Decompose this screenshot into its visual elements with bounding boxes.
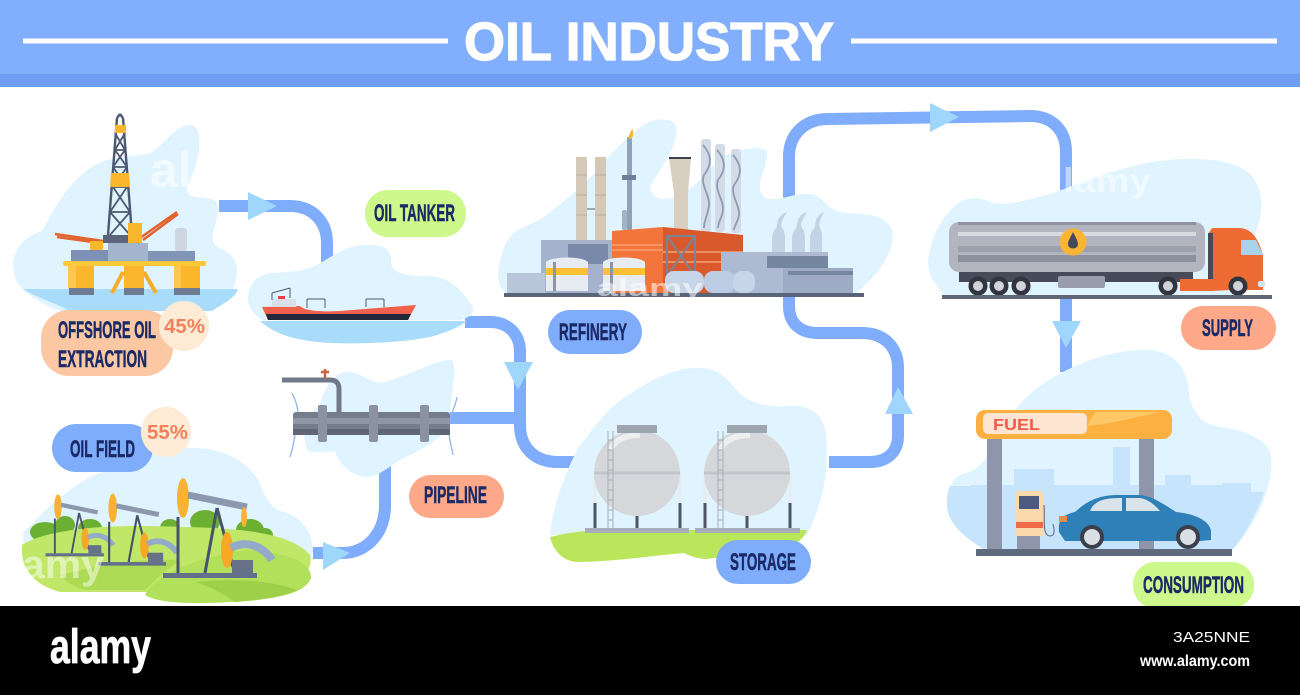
city skyline: [947, 447, 1264, 550]
oil rig: [55, 114, 206, 295]
label: pipeline: PIPELINE: [424, 482, 487, 509]
hills: [22, 526, 311, 592]
deck buildings: [71, 250, 108, 262]
chimneys: [576, 157, 587, 242]
storage sphere 1: [585, 425, 689, 533]
panel: refinery: [498, 120, 893, 354]
right building: [721, 252, 828, 293]
percentage: 55%: 55%: [147, 422, 188, 444]
water: [23, 289, 238, 311]
label: supply: [1181, 306, 1276, 350]
percentage: 45%: [159, 301, 209, 351]
tanker truck: [942, 222, 1272, 299]
background blob: offshore: [13, 125, 237, 311]
label: offshore oil extraction: OFFSHORE OIL: [58, 317, 156, 344]
twisted stacks: [701, 139, 741, 233]
ship: [262, 288, 416, 320]
background blob: pipeline: [305, 360, 454, 477]
platform legs: [112, 272, 156, 293]
watermark: rig blob: al: [150, 142, 192, 198]
pumpjack: medium: [98, 494, 177, 566]
gas station: [976, 410, 1232, 556]
flow arrows: [248, 103, 1081, 570]
cranes: [55, 234, 103, 243]
fuel pump: [1016, 491, 1054, 550]
flow pipes: [219, 116, 1066, 553]
panel: supply: [928, 159, 1276, 350]
title: OIL INDUSTRY: [464, 12, 834, 72]
wheels: [969, 277, 1247, 295]
panel: oil tanker: [248, 190, 473, 343]
background blob: storage: [550, 368, 827, 535]
car: [1059, 495, 1211, 549]
header banner: [0, 0, 1300, 87]
pumpjack: large: [163, 478, 272, 578]
derrick: [108, 114, 132, 235]
panel: offshore oil extraction: [13, 114, 238, 376]
bushes: [30, 510, 273, 542]
storage tanks: [546, 258, 645, 291]
label: oil field: [52, 424, 153, 472]
panel: oil field: [22, 407, 313, 603]
background blob: refinery: [498, 120, 893, 293]
label: supply: SUPPLY: [1202, 315, 1253, 342]
silos: [772, 212, 787, 252]
label: offshore oil extraction: [41, 310, 173, 376]
label: oil tanker: [365, 190, 466, 237]
footer url: www.alamy.com: [1139, 653, 1250, 670]
background blob: consumption: [947, 350, 1271, 550]
footer bar: [0, 606, 1300, 695]
big chimney: [669, 158, 691, 238]
truck cab: [1180, 228, 1263, 291]
flare tower: [627, 137, 632, 230]
footer logo: alamy: [50, 621, 151, 674]
storage sphere 2: [695, 425, 800, 533]
watermark: field: amy: [22, 543, 105, 587]
background blob: supply: [928, 159, 1262, 295]
label: storage: [716, 540, 811, 584]
water: [260, 321, 467, 343]
image id: 3A25NNE: [1173, 629, 1250, 646]
label: oil tanker: OIL TANKER: [374, 200, 455, 227]
background blob: field: [23, 448, 313, 565]
label: storage: STORAGE: [730, 549, 796, 576]
label: consumption: [1133, 562, 1254, 608]
percentage: 55%: [141, 407, 191, 457]
grass: [550, 530, 807, 562]
pipeline graphic: [282, 369, 457, 457]
panel: pipeline: [282, 360, 504, 518]
watermark: refinery: alamy: [597, 275, 704, 302]
label: refinery: [548, 310, 642, 354]
pumpjack: small: [46, 494, 113, 556]
fuel sign text: FUEL: [993, 417, 1040, 434]
horizontal tanks: [665, 271, 704, 293]
background blob: tanker: [248, 245, 473, 320]
oil drop badge: [1060, 228, 1086, 256]
watermark: supply: lamy: [1063, 162, 1151, 200]
panel: storage: [550, 368, 827, 584]
label: pipeline: [409, 475, 504, 518]
panel: consumption: [947, 350, 1271, 608]
refinery plant: [504, 129, 864, 297]
percentage: 45%: 45%: [164, 316, 205, 338]
label: offshore oil extraction: EXTRACTION: [58, 346, 147, 373]
grey building: [541, 240, 612, 293]
label: oil field: OIL FIELD: [70, 436, 135, 463]
orange building: [612, 227, 663, 293]
label: refinery: REFINERY: [559, 319, 627, 346]
